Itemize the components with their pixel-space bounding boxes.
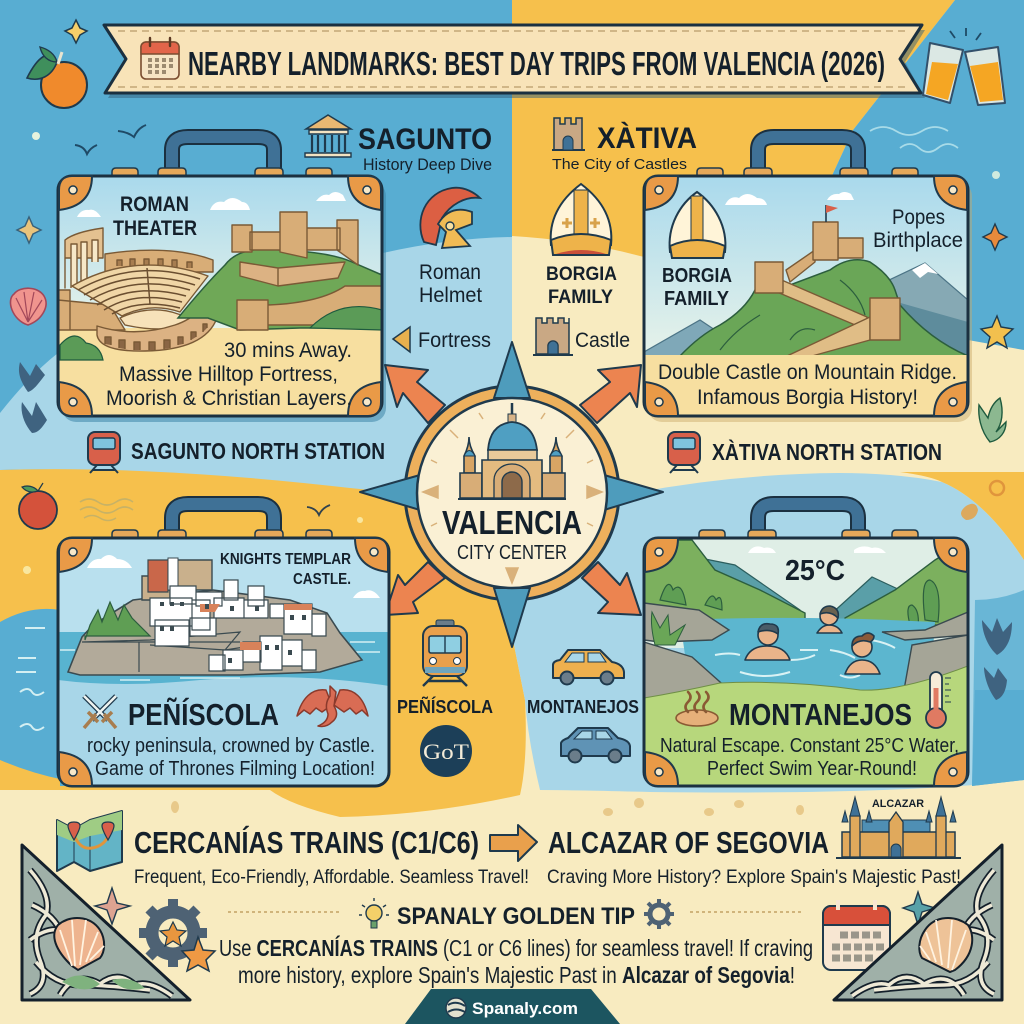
suitcase description: Montanejos: Perfect Swim Year-Round!: [707, 758, 917, 780]
compass star points: [360, 342, 663, 647]
sand: [644, 355, 968, 420]
suitcase description: Peniscola: Game of Thrones Filming Location!: [95, 758, 375, 780]
suitcase: Montanejos: [644, 504, 968, 790]
decorative birds and dot left: [75, 125, 146, 154]
suitcase description: Xativa: [658, 361, 957, 409]
compass ticks: [423, 413, 602, 583]
icon: dot: [32, 132, 40, 140]
description: Cercanias: Frequent, Eco-Friendly, Affordable. Seamless Travel!: [134, 867, 529, 888]
label: Peniscola: PEÑÍSCOLA: [397, 696, 493, 717]
transport: Peniscola train: [423, 620, 467, 686]
compass: Valencia city centre: VALENCIA: [442, 504, 582, 541]
illustration: Roman theater: [58, 228, 218, 360]
footer: Spanaly.com badge: [405, 989, 620, 1024]
icon: crossed swords: [84, 696, 116, 728]
icon: dragon: [297, 686, 368, 726]
label: Knights Templar Castle: KNIGHTS TEMPLAR: [220, 551, 351, 568]
suitcase description: Peniscola: [87, 735, 375, 780]
icon: leaves right: [982, 618, 1012, 700]
icon: celtic corner left with shell: [22, 845, 190, 1000]
arrows: [385, 365, 641, 615]
suitcase description: Montanejos: [660, 735, 959, 780]
label: Fortress: Fortress: [418, 329, 491, 352]
label: Knights Templar Castle: [220, 551, 351, 588]
label: Montanejos: MONTANEJOS: [527, 697, 639, 717]
label: Roman Helmet: Helmet: [419, 284, 482, 307]
icon: papal mitre in suitcase: [670, 192, 725, 258]
heading: Sagunto: History Deep Dive: [363, 155, 492, 174]
suitcase label: Roman Theater: [113, 193, 197, 240]
decorative waves top right: [870, 127, 958, 152]
heading: Xativa: The City of Castles: [552, 156, 687, 173]
illustration: green ridge: [680, 260, 968, 356]
illustration: castle wall: [755, 205, 900, 356]
arrow: [490, 825, 537, 861]
suitcase: Sagunto: [58, 137, 386, 422]
icon: leaves left: [19, 362, 47, 433]
station: Sagunto North: [88, 432, 385, 473]
label: Borgia Family: FAMILY: [548, 287, 613, 308]
illustration: green hills: [646, 540, 806, 619]
icon: hot spring: [676, 692, 718, 726]
icon: celtic corner right with shell: [834, 845, 1002, 1000]
label: Borgia Family: BORGIA: [662, 265, 732, 287]
heading: Sagunto: SAGUNTO: [358, 123, 492, 156]
corners: [645, 538, 967, 786]
icon: sparkle pink: [95, 888, 130, 924]
golden tip text: Use CERCANÍAS TRAINS (C1 or C6 lines) for seamless travel! If craving: [219, 934, 813, 961]
panel: lower blue: [58, 677, 389, 790]
icon: fortress pointer: [393, 327, 410, 352]
icon: sparkle right top: [983, 224, 1007, 250]
icon: blue car: [561, 728, 630, 762]
label: Roman Helmet: Roman: [419, 261, 481, 284]
icon: cathedral: [458, 403, 566, 499]
station: Sagunto North: SAGUNTO NORTH STATION: [131, 438, 385, 464]
icon: dot: [992, 171, 1000, 179]
illustration: trees: [660, 580, 939, 628]
swimmers: [745, 606, 880, 674]
bottom section: travel tips: [22, 797, 1002, 1024]
icon: dots: [23, 517, 363, 574]
icon: logo mark: [446, 998, 466, 1018]
icon: apple: [19, 483, 57, 529]
icon: leaf right: [979, 398, 1006, 442]
badge: Game of Thrones: [420, 725, 472, 777]
heading: Alcazar: ALCAZAR OF SEGOVIA: [548, 825, 829, 860]
illustration: mountains: [646, 319, 713, 355]
golden tip heading: SPANALY GOLDEN TIP: [397, 903, 635, 930]
golden tip text: more history, explore Spain's Majestic Past in Alcazar of Segovia!: [238, 962, 795, 988]
label: Castle: Castle: [575, 329, 630, 352]
illustration: hilltop fortress: [178, 212, 382, 330]
icon: calendar right: [823, 900, 890, 970]
heading: Cercanias trains: CERCANÍAS TRAINS (C1/C6): [134, 825, 479, 860]
description: Alcazar: Craving More History? Explore Spain's Majestic Past!: [547, 867, 961, 888]
corners: [645, 176, 967, 416]
icon: Alcazar castle: [836, 797, 961, 858]
heading: Peniscola: PEÑÍSCOLA: [128, 697, 279, 732]
icon: small castle: [533, 318, 573, 355]
compass: Valencia city centre: [360, 342, 663, 647]
icon: orange: [27, 47, 87, 108]
icon: papal mitre: [551, 184, 611, 255]
icon: ring decoration right: [990, 481, 1004, 495]
icon: sparkle teal: [903, 892, 935, 925]
station: Xativa North: [668, 432, 942, 473]
icon: Alcazar castle: ALCAZAR: [872, 798, 924, 810]
suitcase description: Montanejos: Natural Escape. Constant 25°C Water,: [660, 735, 959, 757]
label: Borgia Family: [546, 264, 617, 308]
suitcase description: Peniscola: rocky peninsula, crowned by Castle.: [87, 735, 375, 757]
icon: train: [88, 432, 120, 473]
icon: thermometer: [926, 672, 951, 728]
rocks: [644, 603, 968, 700]
label: Roman Helmet: [419, 261, 482, 307]
icon: star right: [981, 316, 1013, 348]
decorative waves and birds: [80, 499, 133, 520]
illustration: teal hills: [707, 558, 897, 619]
label: 25 degrees: 25°C: [785, 555, 845, 587]
suitcase description: Sagunto: 30 mins Away.: [224, 339, 352, 362]
icon: gear with star: [139, 899, 215, 971]
illustration: walled town: [68, 558, 362, 675]
footer: Spanaly.com badge: Spanaly.com: [472, 999, 578, 1018]
illustration: hot spring pool: [680, 618, 935, 690]
label: Borgia Family: [662, 265, 732, 310]
icon: light bulb: [359, 898, 389, 928]
icon: shell left: [10, 288, 46, 325]
icon: Roman helmet: [420, 188, 480, 248]
icon: calendar: [141, 38, 179, 79]
suitcase label: Roman Theater: ROMAN: [120, 193, 189, 216]
clouds: [77, 192, 346, 217]
golden tip text: [219, 934, 813, 988]
suitcase description: Xativa: Infamous Borgia History!: [697, 386, 918, 409]
icon: yellow car: [553, 650, 624, 684]
heading: Montanejos: MONTANEJOS: [729, 697, 912, 732]
label: Popes Birthplace: Birthplace: [873, 229, 963, 252]
compass: Valencia city centre: CITY CENTER: [457, 542, 567, 564]
icon: beer glasses: [923, 28, 1005, 105]
heading: Xativa: XÀTIVA: [597, 121, 697, 155]
title banner: [104, 25, 925, 98]
suitcase description: Sagunto: Moorish & Christian Layers.: [106, 387, 352, 410]
label: Knights Templar Castle: CASTLE.: [293, 571, 351, 588]
suitcase label: Roman Theater: THEATER: [113, 217, 197, 240]
corners: [59, 538, 388, 786]
heading: Xativa: [552, 118, 697, 173]
suitcase description: Xativa: Double Castle on Mountain Ridge.: [658, 361, 957, 384]
icon: temple: [305, 115, 351, 157]
icon: castle tower: [552, 118, 585, 150]
heading: Sagunto: [305, 115, 492, 174]
badge: Game of Thrones: GoT: [423, 739, 470, 764]
icon: sparkle top left: [65, 20, 87, 43]
golden tip heading: [228, 898, 802, 930]
icon: sparkle left: [17, 217, 41, 243]
label: Popes Birthplace: [873, 206, 963, 252]
suitcase: Xativa: [644, 137, 972, 422]
suitcase description: Sagunto: Massive Hilltop Fortress,: [119, 363, 338, 386]
icon: small gear: [644, 899, 674, 929]
label: Popes Birthplace: Popes: [892, 206, 945, 229]
suitcase description: Sagunto: [106, 339, 352, 410]
corners: [59, 176, 381, 416]
suitcase: Peniscola: [58, 504, 389, 790]
station: Xativa North: XÀTIVA NORTH STATION: [712, 438, 942, 465]
label: Borgia Family: FAMILY: [664, 288, 730, 310]
icon: route map: [57, 811, 122, 871]
icon: shell shapes right: [961, 504, 978, 520]
label: Borgia Family: BORGIA: [546, 264, 617, 285]
icon: train: [668, 432, 700, 473]
